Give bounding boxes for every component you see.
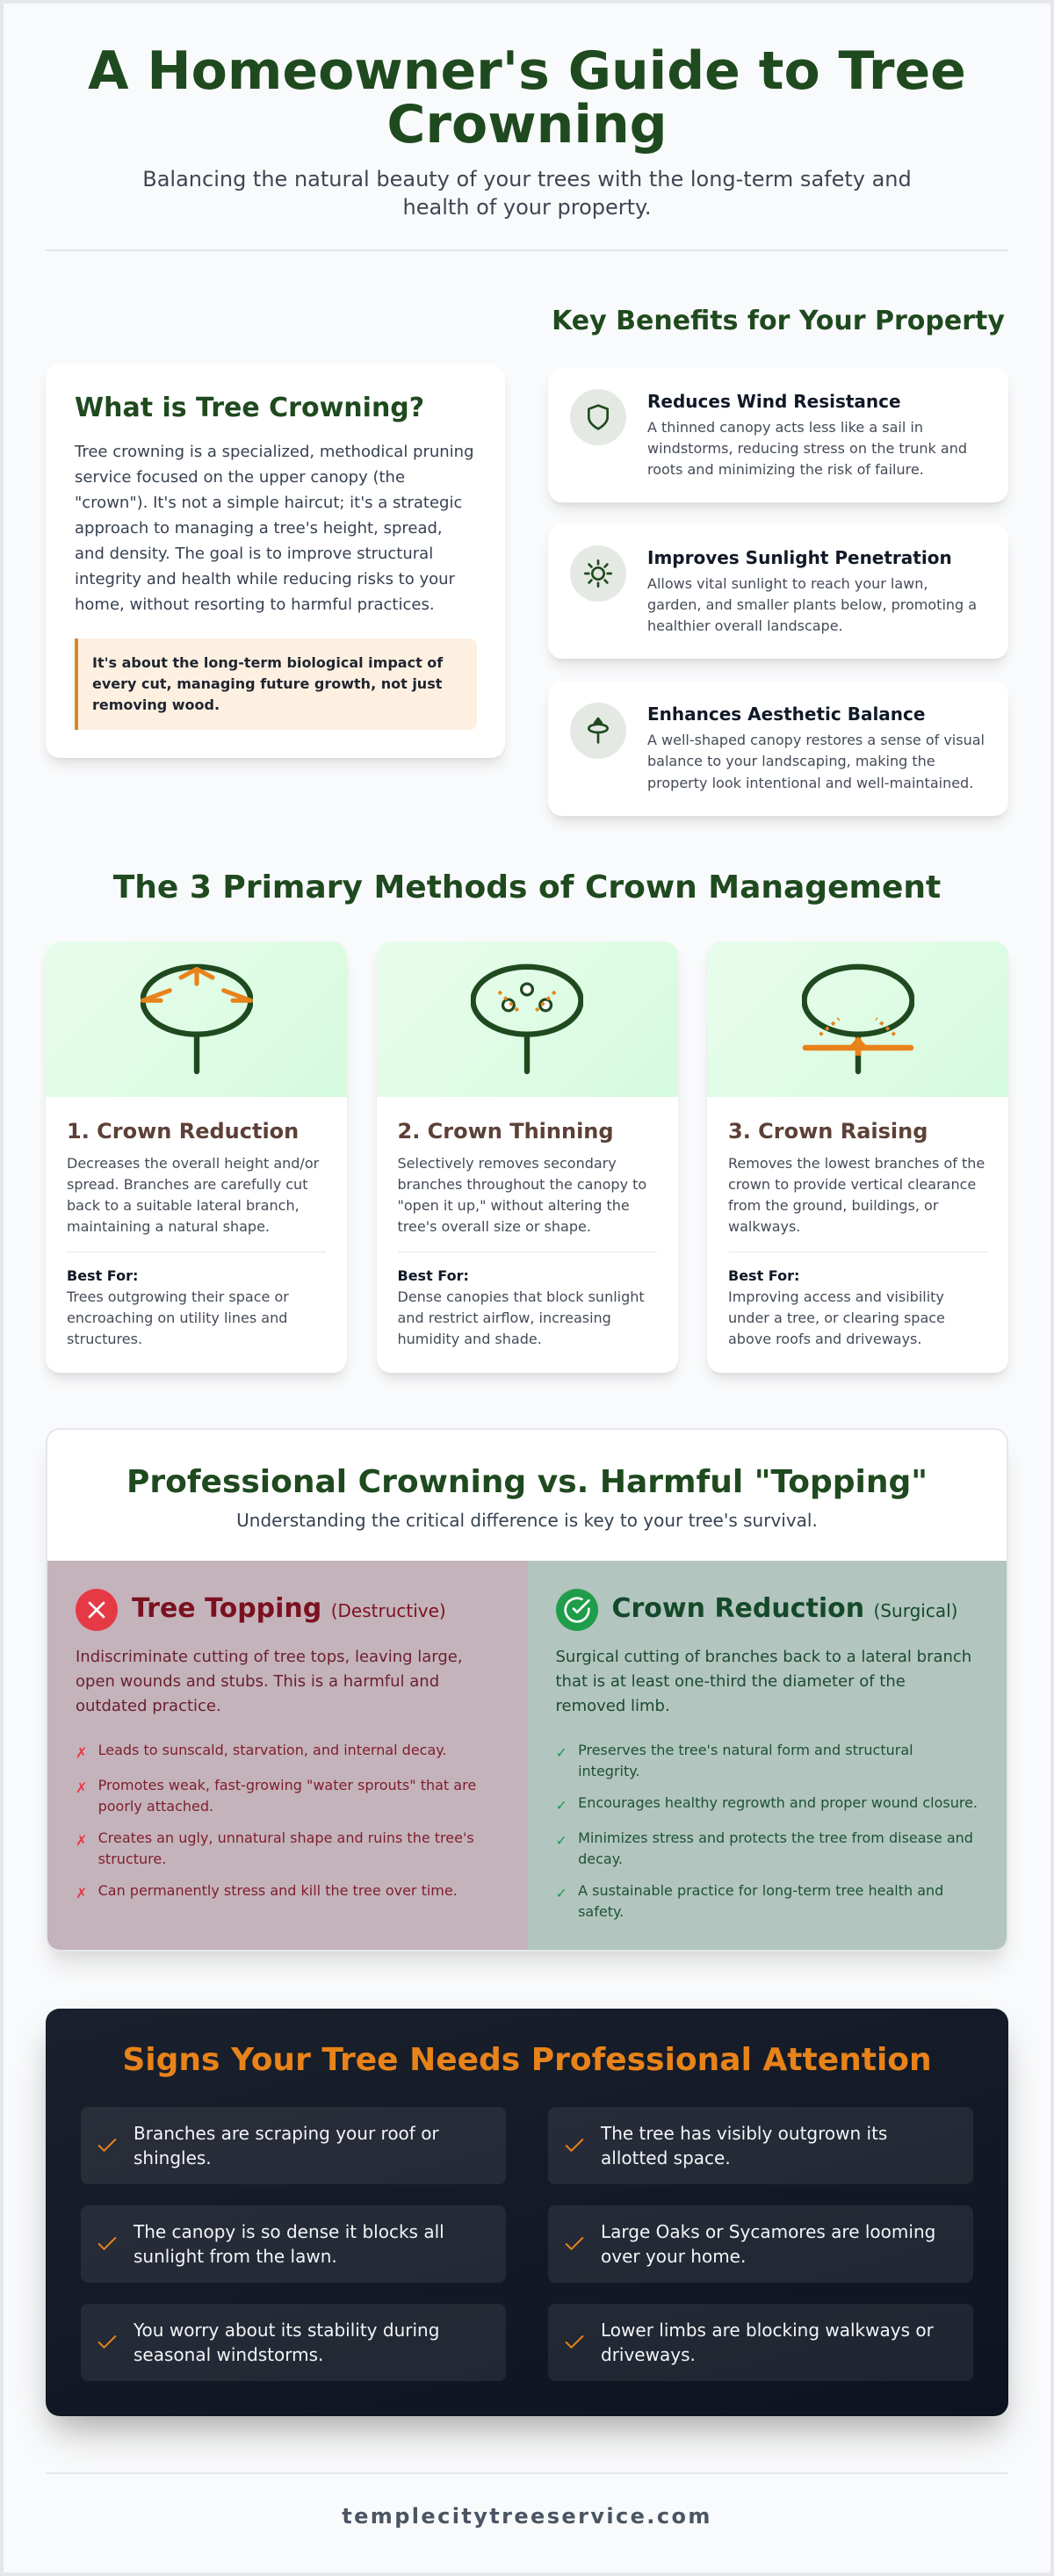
list item: ✗ [76, 1885, 87, 1901]
text: Allows vital sunlight to reach your lawn, [647, 575, 928, 592]
list item: Leads to sunscald, starvation, and internal decay. [98, 1741, 447, 1758]
text: "open it up," without altering the [397, 1196, 630, 1214]
text: Decreases the overall height and/or [67, 1154, 319, 1172]
list item [555, 1741, 913, 1779]
sign item [548, 2304, 973, 2381]
panel: crown reduction surgical [527, 1561, 1007, 1950]
sign item: seasonal windstorms. [134, 2344, 323, 2365]
icon: tree [570, 703, 626, 759]
sign item: Large Oaks or Sycamores are looming [601, 2221, 935, 2242]
heading: what is tree crowning: What is Tree Crowning? [75, 393, 424, 423]
best for: above roofs and driveways. [728, 1331, 921, 1347]
panel: benefit aesthetic [548, 682, 1008, 815]
text: Surgical cutting of branches back to a lateral branch [555, 1648, 971, 1666]
list item [555, 1881, 943, 1920]
panel: crown reduction [46, 942, 347, 1373]
text [647, 732, 985, 791]
panel: tree topping [47, 1561, 527, 1950]
best for: encroaching on utility lines and [67, 1310, 287, 1326]
icon: shield [570, 389, 626, 445]
list item: Preserves the tree's natural form and structural [578, 1741, 913, 1758]
text: definition [74, 443, 474, 614]
list item: safety. [578, 1902, 624, 1920]
list item [555, 1829, 973, 1867]
text [647, 419, 967, 478]
best for: Best For: [397, 1267, 469, 1284]
sign item [81, 2107, 506, 2184]
text: windstorms, reducing stress on the trunk and [647, 440, 967, 457]
sign item: Lower limbs are blocking walkways or [601, 2320, 934, 2341]
sign item: Branches are scraping your roof or [134, 2123, 439, 2144]
panel: signs [46, 2009, 1008, 2416]
list item: decay. [578, 1850, 623, 1867]
text: Selectively removes secondary [397, 1154, 617, 1172]
callout: It's about the long-term biological impact of [92, 654, 443, 671]
sign item [548, 2205, 973, 2283]
title [88, 40, 966, 155]
text: definition: home, without resorting to harmful practices. [75, 595, 435, 614]
heading: comparison: Professional Crowning vs. Harmful "Topping" [126, 1464, 928, 1500]
text [647, 575, 977, 634]
text [397, 1154, 646, 1235]
list item: ✗ [76, 1779, 87, 1795]
heading: key benefits: Key Benefits for Your Property [552, 306, 1005, 336]
heading: signs: Signs Your Tree Needs Professional Attention [122, 2042, 932, 2078]
diagram: crown reduction [46, 942, 347, 1097]
list item: ✗ [76, 1832, 87, 1848]
text: A thinned canopy acts less like a sail in [647, 419, 923, 436]
text [67, 1154, 320, 1235]
list item: Promotes weak, fast-growing "water sprouts" that are [98, 1776, 476, 1793]
subheading: Understanding the critical difference is key to your tree's survival. [236, 1510, 818, 1531]
list item: ✓ [555, 1832, 567, 1848]
text [76, 1648, 463, 1715]
text [555, 1648, 971, 1715]
list item: integrity. [578, 1762, 640, 1779]
text: that is at least one-third the diameter of the [555, 1672, 906, 1691]
text: definition: integrity and health while reducing risks to your [75, 570, 455, 588]
text: definition: and density. The goal is to improve structural [75, 545, 433, 563]
text: spread. Branches are carefully cut [67, 1175, 307, 1193]
heading: 3. Crown Raising [728, 1119, 928, 1144]
list item: Minimizes stress and protects the tree from disease and [578, 1829, 973, 1846]
best for: Trees outgrowing their space or [67, 1288, 289, 1305]
text: back to a suitable lateral branch, [67, 1196, 300, 1214]
subtitle [142, 167, 912, 220]
panel: crown thinning [376, 942, 678, 1373]
best for: Best For: [728, 1267, 799, 1284]
heading: Reduces Wind Resistance [647, 391, 901, 412]
text: A well-shaped canopy restores a sense of visual [647, 732, 985, 748]
text: maintaining a natural shape. [67, 1217, 270, 1235]
list item: Can permanently stress and kill the tree over time. [98, 1881, 458, 1899]
list item: ✓ [555, 1885, 567, 1901]
subtitle: Balancing the natural beauty of your trees with the long-term safety and [142, 167, 912, 191]
sign item: You worry about its stability during [134, 2320, 439, 2341]
heading: Crown Reduction (Surgical) [611, 1593, 957, 1624]
icon: x [76, 1589, 118, 1631]
best for: Improving access and visibility [728, 1288, 944, 1305]
heading: 1. Crown Reduction [67, 1119, 299, 1144]
panel: benefit sunlight [548, 524, 1008, 659]
sign item: The tree has visibly outgrown its [601, 2123, 887, 2144]
callout: every cut, managing future growth, not just [92, 675, 442, 692]
text: outdated practice. [76, 1697, 221, 1715]
sign item: sunlight from the lawn. [134, 2246, 337, 2267]
heading: Enhances Aesthetic Balance [647, 704, 925, 725]
text: tree's overall size or shape. [397, 1217, 591, 1235]
icon: check circle [555, 1589, 597, 1631]
title: Crowning [386, 94, 668, 155]
diagram: crown raising [707, 942, 1008, 1097]
list item [76, 1829, 474, 1867]
text: Removes the lowest branches of the [728, 1154, 985, 1172]
sign item: shingles. [134, 2147, 212, 2168]
text: Indiscriminate cutting of tree tops, leaving large, [76, 1648, 463, 1666]
sign item [548, 2107, 973, 2184]
list item: ✓ [555, 1744, 567, 1760]
text: walkways. [728, 1217, 800, 1235]
text: crown to provide vertical clearance [728, 1175, 976, 1193]
heading: Tree Topping (Destructive) [132, 1593, 446, 1624]
callout: removing wood. [92, 696, 220, 713]
text: definition: Tree crowning is a specialized, methodical pruning [75, 443, 474, 461]
text: branches throughout the canopy to [397, 1175, 646, 1193]
panel: comparison [46, 1428, 1008, 1952]
heading: 2. Crown Thinning [397, 1119, 614, 1144]
list item: ✗ [76, 1744, 87, 1760]
icon: sun [570, 545, 626, 602]
sign item [81, 2304, 506, 2381]
panel: what is tree crowning [46, 364, 505, 758]
best for: structures. [67, 1331, 142, 1347]
sign item: allotted space. [601, 2147, 731, 2168]
title: A Homeowner's Guide to Tree [88, 40, 966, 102]
best for [397, 1267, 645, 1347]
sign item: over your home. [601, 2246, 746, 2267]
text: definition: service focused on the upper canopy (the [75, 468, 405, 487]
list item: Encourages healthy regrowth and proper wound closure. [578, 1793, 978, 1811]
text: garden, and smaller plants below, promoting a [647, 596, 977, 613]
callout [75, 639, 477, 730]
list item: poorly attached. [98, 1797, 213, 1815]
best for: and restrict airflow, increasing [397, 1310, 611, 1326]
sign item: The canopy is so dense it blocks all [134, 2221, 444, 2242]
text: healthier overall landscape. [647, 617, 843, 634]
diagram: crown thinning [376, 942, 678, 1097]
sign item: driveways. [601, 2344, 696, 2365]
panel: crown raising [707, 942, 1008, 1373]
footer: templecitytreeservice.com [342, 2504, 712, 2529]
list item: structure. [98, 1850, 166, 1867]
text: removed limb. [555, 1697, 670, 1715]
text: open wounds and stubs. This is a harmful and [76, 1672, 439, 1691]
best for [67, 1267, 289, 1347]
list item: A sustainable practice for long-term tree health and [578, 1881, 943, 1899]
text: property look intentional and well-maintained. [647, 775, 973, 791]
sign item [81, 2205, 506, 2283]
list item: ✓ [555, 1797, 567, 1813]
best for [728, 1267, 945, 1347]
text: definition: approach to managing a tree's height, spread, [75, 519, 443, 538]
best for: Best For: [67, 1267, 138, 1284]
text: roots and minimizing the risk of failure. [647, 461, 924, 478]
list item [76, 1776, 476, 1815]
best for: humidity and shade. [397, 1331, 542, 1347]
list item: Creates an ugly, unnatural shape and ruins the tree's [98, 1829, 474, 1846]
text: definition: "crown"). It's not a simple haircut; it's a strategic [75, 494, 462, 512]
heading: methods: The 3 Primary Methods of Crown Management [113, 869, 941, 906]
best for: Dense canopies that block sunlight [397, 1288, 645, 1305]
heading: Improves Sunlight Penetration [647, 547, 952, 568]
text: balance to your landscaping, making the [647, 753, 935, 769]
text: from the ground, buildings, or [728, 1196, 938, 1214]
text [728, 1154, 985, 1235]
best for: under a tree, or clearing space [728, 1310, 945, 1326]
subtitle: health of your property. [403, 195, 651, 220]
panel: benefit wind resistance [548, 368, 1008, 502]
